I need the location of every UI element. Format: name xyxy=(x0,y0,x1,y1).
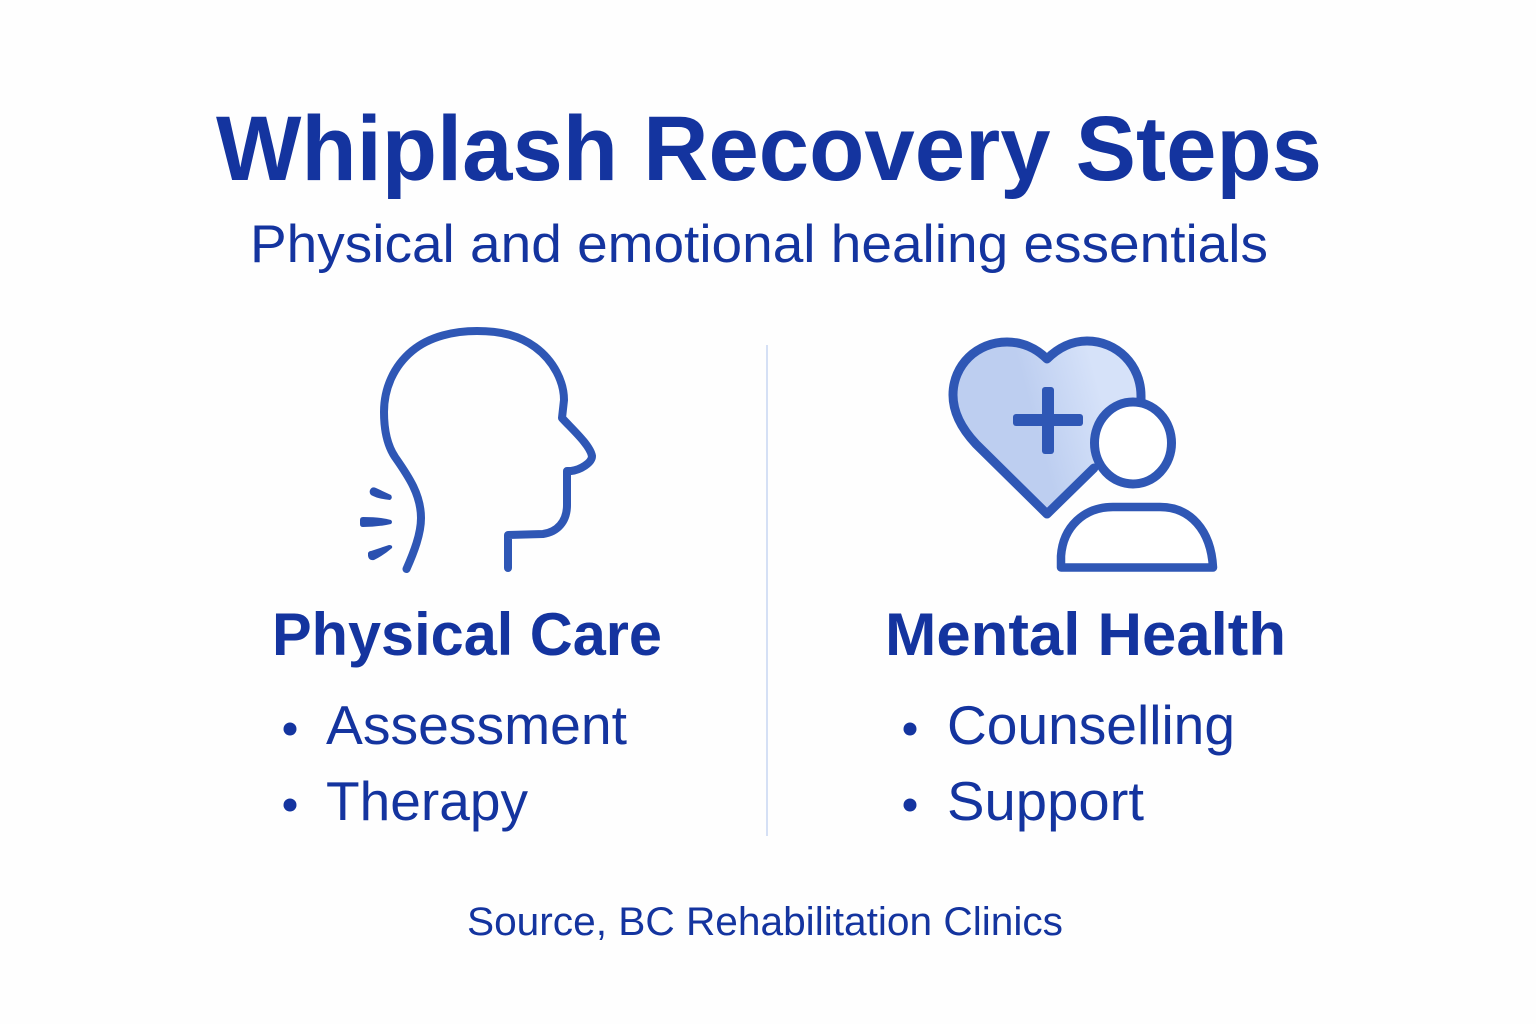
list: mental health items xyxy=(904,694,1235,832)
center divider xyxy=(766,345,768,836)
heading: physical care: Physical Care xyxy=(272,601,662,668)
list: physical care items: Therapy xyxy=(326,770,529,832)
heading: mental health: Mental Health xyxy=(885,601,1286,668)
plus sign xyxy=(1013,387,1083,454)
panel: mental health xyxy=(885,341,1286,832)
head outline xyxy=(384,331,592,569)
pain lines xyxy=(360,487,392,560)
icon: heart with plus and person xyxy=(953,341,1213,568)
list: physical care items xyxy=(284,694,627,832)
person body xyxy=(1061,507,1213,568)
list: mental health items: Support xyxy=(947,770,1144,832)
source note: Source, BC Rehabilitation Clinics xyxy=(467,900,1063,944)
subtitle: Physical and emotional healing essentials xyxy=(250,215,1268,274)
person head xyxy=(1094,402,1172,484)
icon: head with neck pain xyxy=(360,331,592,569)
heart xyxy=(953,341,1141,514)
list: physical care items: Assessment xyxy=(326,694,627,756)
list: mental health items: Counselling xyxy=(947,694,1235,756)
title: Whiplash Recovery Steps xyxy=(216,98,1322,200)
panel: physical care xyxy=(272,331,662,832)
